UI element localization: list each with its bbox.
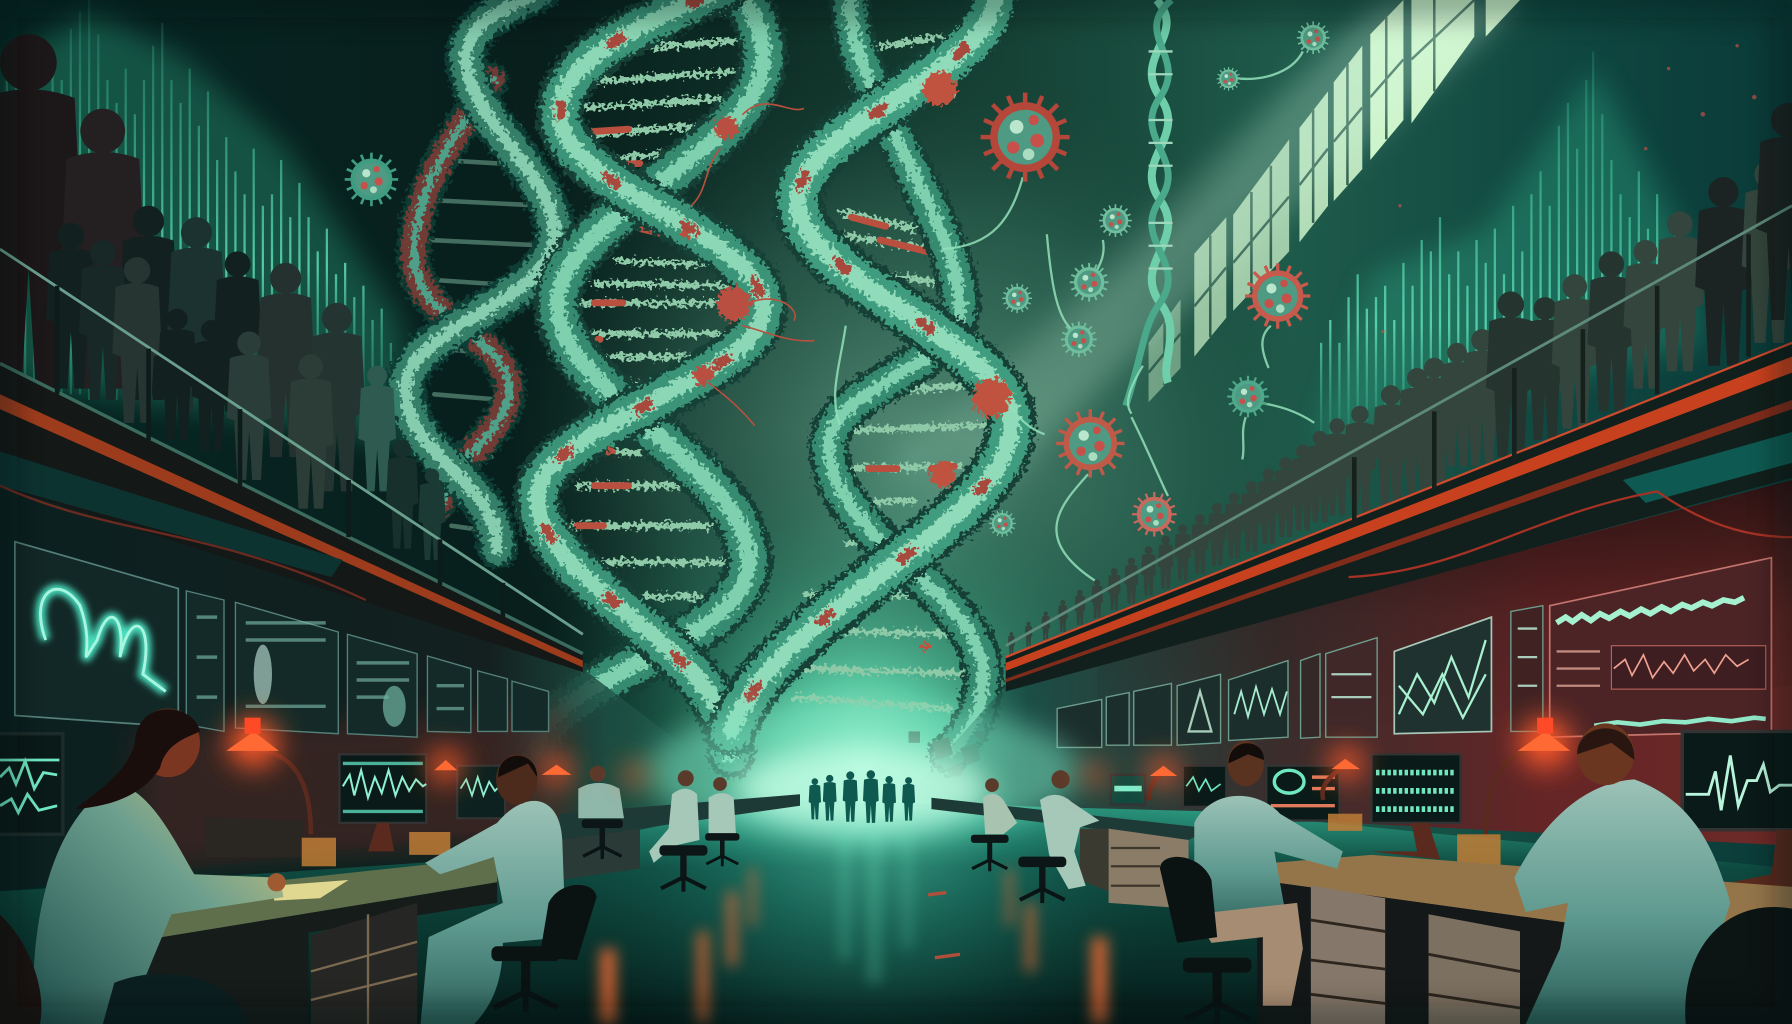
small distant helix [1126, 0, 1173, 406]
office chair [1685, 907, 1792, 1024]
left wall green waveform streaks [0, 0, 411, 446]
virus large top [981, 93, 1070, 182]
right wall red sparks [1381, 44, 1757, 333]
debris below helix [909, 731, 985, 777]
left foreground desk [69, 857, 497, 1024]
desk drawers [311, 903, 417, 1024]
desk drawers [1311, 886, 1520, 1024]
screen: mountain chart [1394, 617, 1491, 734]
floor [0, 800, 1792, 1024]
right gallery crowd [1008, 103, 1792, 655]
virus right [1245, 263, 1310, 329]
left wall below gallery [0, 480, 754, 891]
virus tails [835, 51, 1314, 581]
screen: large waveform [1550, 558, 1771, 737]
virus pink [1132, 492, 1177, 537]
screen: data panels left [186, 591, 549, 737]
left gallery walkway [0, 249, 583, 672]
background helix back-left [406, 0, 554, 549]
scientist: woman at left desk [0, 709, 286, 1024]
office chair [491, 885, 597, 1013]
central mint glow [434, 400, 1326, 857]
scientist: man at right desk [1160, 741, 1343, 1024]
skylight windows [1149, 0, 1520, 402]
right wall below gallery [903, 480, 1792, 846]
main helix right [731, 0, 1011, 754]
test tube racks [302, 814, 1501, 869]
left gallery crowd [0, 34, 446, 560]
window light rays [731, 0, 1520, 709]
scientist: man at left [421, 754, 597, 1024]
floor reflections [600, 823, 1107, 1024]
helix right rungs [794, 29, 994, 709]
virus center [1056, 409, 1124, 478]
distant desks left [206, 794, 800, 880]
main helix left [537, 0, 814, 754]
helix left red frayed threads [691, 104, 814, 425]
helix right strands [731, 0, 1011, 754]
right foreground desk [1257, 855, 1792, 1024]
right gallery walkway [1006, 206, 1792, 691]
monitors [0, 731, 1792, 889]
virus left wall [345, 153, 398, 206]
helix right red damage clusters [921, 72, 1011, 651]
office chair [1160, 857, 1251, 1024]
virus small group [989, 21, 1329, 537]
scientist: right foreground man [1514, 723, 1792, 1024]
screen: data panels right [1057, 606, 1543, 747]
virus mint [1227, 376, 1269, 417]
desk lamps [226, 718, 1570, 837]
central horizon glow [646, 703, 1080, 840]
helix left strands [537, 0, 763, 754]
distant silhouettes [809, 770, 915, 823]
right wall green waveform streaks [1314, 51, 1703, 446]
mid-distance scientists [578, 766, 1099, 903]
floor litter [928, 893, 960, 958]
left wall screens [15, 542, 549, 737]
right wall screens [1057, 558, 1771, 747]
distant desks right [931, 798, 1211, 909]
helix left red damage clusters [607, 117, 751, 456]
screen: protein ribbon [15, 542, 178, 727]
helix left rungs [566, 11, 760, 597]
